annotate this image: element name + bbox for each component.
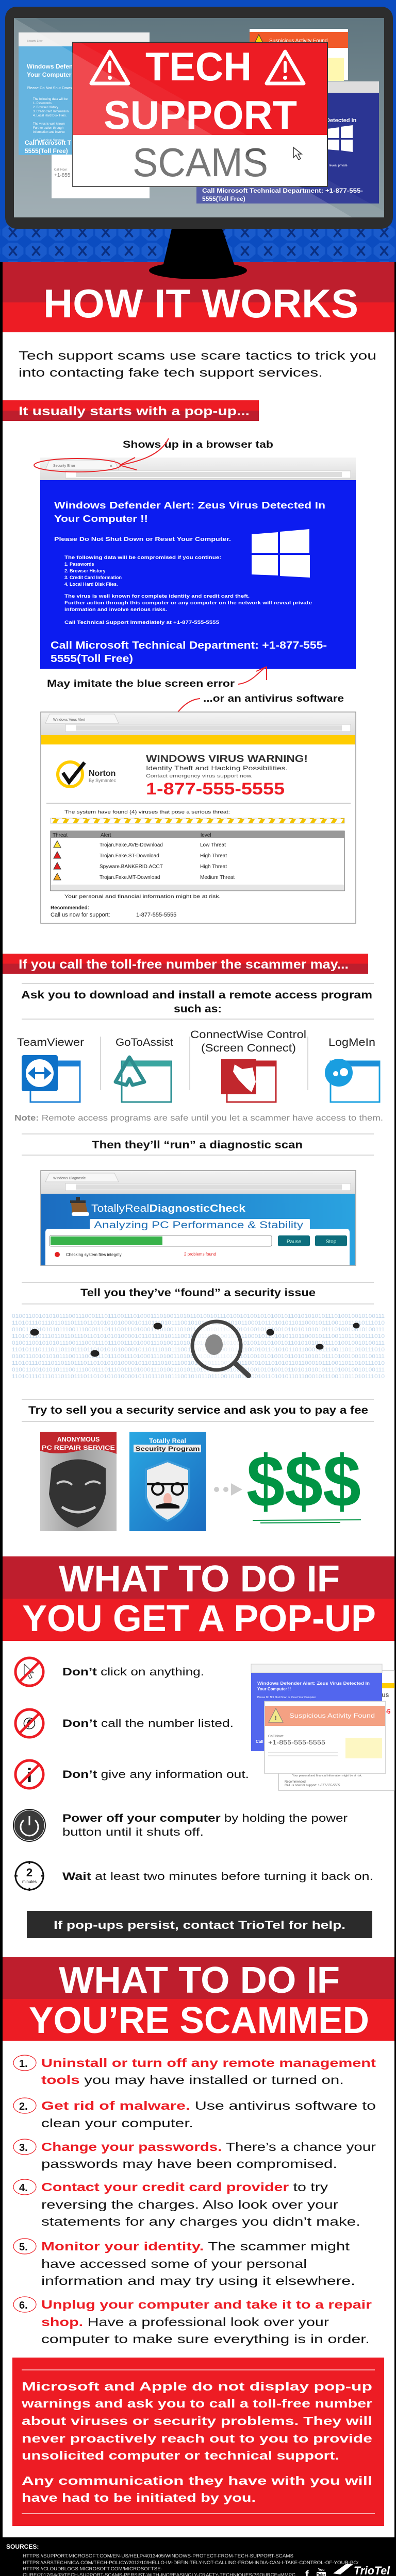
illustration: binary code with bugs and magnifier — [12, 1313, 385, 1380]
popup: light blue defender alert: 3. Credit Card Information — [33, 110, 69, 113]
browser: norton antivirus warning: 1-877-555-5555 — [146, 779, 285, 798]
step 4: reversing the charges. Also look over your — [41, 2198, 338, 2211]
browser: blue screen defender alert: 2. Browser History — [64, 568, 106, 573]
popup cluster illustration: +1-855-555-5555 — [268, 1739, 325, 1746]
caption: or an antivirus software: ...or an antivirus software — [203, 693, 344, 704]
popup: light blue defender alert: 5555(Toll Free) — [25, 147, 68, 155]
intro text: into contacting fake tech support services. — [19, 366, 323, 379]
popup: light blue defender alert: Windows Defender Alert — [27, 63, 98, 70]
step 6: Unplug your computer and take it to a repair — [41, 2298, 372, 2311]
arrow: to blue screen — [238, 667, 267, 684]
banner: what to do if you get a pop-up: WHAT TO DO IF — [59, 1558, 340, 1600]
icon: no phone — [15, 1709, 43, 1737]
popup cluster illustration: 5-5 — [382, 1708, 391, 1715]
banner: what to do if you're scammed: YOU’RE SCAMMED — [29, 2000, 369, 2041]
tip: power off: button until it shuts off. — [62, 1826, 204, 1838]
step 5 — [13, 2239, 355, 2287]
illustration: binary code with bugs and magnifier: 1101011101110110110111011010101010000101101110101110010101101110010101100010110101011011000101110011011010111010 — [12, 1360, 385, 1366]
callout: contact triotel — [27, 1911, 372, 1938]
icon: no info: i — [27, 1765, 32, 1787]
step 6: shop. Have a professional look over your — [41, 2315, 329, 2329]
browser: norton antivirus warning: Contact emergency virus support now. — [146, 773, 253, 778]
product box: totally real security program: Security Program — [135, 1445, 200, 1452]
title box: SUPPORT — [104, 92, 297, 138]
popup: light blue defender alert: 4. Local Hard Disk Files. — [33, 114, 67, 117]
popup cluster illustration: Call us now for support: 1-877-555-5555 — [285, 1784, 340, 1787]
tip: power off: Power off your computer by holding the power — [62, 1812, 348, 1824]
browser: blue screen defender alert: Call Microsoft Technical Department: +1-877-555- — [51, 640, 327, 651]
icon: windows logo — [252, 529, 310, 578]
popup cluster illustration: ! — [275, 1715, 277, 1721]
browser: norton antivirus warning: Norton — [89, 769, 116, 778]
product box: anonymous pc repair service: ANONYMOUS — [57, 1436, 100, 1443]
icon: no phone: ✆ — [23, 1716, 36, 1733]
popup cluster illustration — [251, 1664, 394, 1790]
popup: dark blue defender alert: Detected In — [326, 117, 357, 124]
heading: remote access program — [21, 989, 372, 1015]
icon: cursor — [293, 147, 302, 160]
banner: how it works: HOW IT WORKS — [43, 281, 358, 326]
illustration: binary code with bugs and magnifier: 1101011101110110110111011010101010000101101110101110010101101110010101100010110101011011000101110011011010111010 — [12, 1333, 385, 1340]
popup cluster illustration: Your personal and financial information might be at risk. — [292, 1774, 362, 1777]
tip: wait two minutes: Wait at least two minutes before turning it back on. — [62, 1871, 373, 1883]
title box: TECH — [145, 44, 252, 89]
popup: suspicious activity orange — [250, 29, 348, 81]
footer: sources: HTTPS://CLOUDBLOGS.MICROSOFT.COM/MICROSOFTSE- — [23, 2566, 162, 2571]
popup: dark blue defender alert — [196, 81, 379, 204]
callout: contact triotel: If pop-ups persist, contact TrioTel for help. — [54, 1919, 345, 1931]
browser: fake diagnostic check: TotallyReal DiagnosticCheck — [91, 1203, 246, 1214]
popup: suspicious activity orange: Suspicious Activity Found — [269, 38, 327, 44]
title box: SCAMS — [133, 140, 268, 185]
popup cluster illustration: RUS — [378, 1693, 389, 1699]
banner: how it works — [3, 229, 394, 332]
popup: dark blue defender alert: ill reveal private — [326, 164, 348, 167]
money: $$$: $$$ — [246, 1440, 361, 1522]
illustration: binary code with bugs and magnifier: 0100110010101011100111000111011100111010001110100110101101001011101001010010101001011010101010111010010010100111 — [12, 1327, 385, 1333]
threat table: Spyware.BANKERID.ACCT — [100, 864, 163, 870]
heading: remote access program: Ask you to download and install a remote access program — [21, 989, 372, 1001]
browser: blue screen defender alert: The virus is well known for complete identity and credit card theft. — [64, 594, 250, 599]
threat table: High Threat — [200, 853, 227, 859]
step 4: 4. — [19, 2182, 28, 2194]
threat table: Trojan.Fake.MT-Download — [100, 875, 160, 880]
step 5: Monitor your identity. The scammer might — [41, 2240, 350, 2253]
caption: may imitate the blue screen error: May imitate the blue screen error — [47, 679, 235, 689]
browser: norton antivirus warning: Identity Theft and Hacking Possibilities. — [146, 765, 288, 772]
monitor bezel — [5, 7, 393, 229]
browser: norton antivirus warning: 1-877-555-5555 — [136, 912, 176, 918]
browser: norton antivirus warning: Recommended: — [51, 905, 89, 911]
callout: microsoft and apple warning: Any communication they have with you will — [22, 2474, 372, 2487]
intro text: Tech support scams use scare tactics to trick you — [19, 349, 376, 362]
icon: timer — [14, 1861, 44, 1891]
callout: microsoft and apple warning: unsolicited computer or technical support. — [22, 2449, 339, 2462]
step 5: 5. — [19, 2242, 28, 2253]
illustration: binary code with bugs and magnifier: 1101011101110110110111011010101010000101101110101110010101101110010101100010110101011011000101110011011010111010 — [12, 1374, 385, 1380]
threat table: High Threat — [200, 864, 227, 870]
threat table: Low Threat — [200, 842, 226, 848]
tip: don't call — [15, 1709, 234, 1737]
browser: fake diagnostic check — [41, 1171, 356, 1265]
banner: what to do if you're scammed: WHAT TO DO IF — [59, 1960, 340, 2001]
browser: blue screen defender alert: Security Error — [53, 464, 75, 468]
popup: light blue defender alert: information and involve — [33, 131, 65, 134]
browser: norton antivirus warning: By Symantec — [89, 778, 117, 783]
title box — [73, 42, 327, 187]
callout: microsoft and apple warning: never proactively reach out to you to provide — [22, 2432, 372, 2445]
browser: blue screen defender alert: information and involve serious risks. — [64, 607, 167, 612]
step 1: Uninstall or turn off any remote management — [41, 2056, 376, 2070]
caption: shows up in a browser tab: Shows up in a browser tab — [123, 439, 273, 450]
illustration: binary code with bugs and magnifier: 1101011101110110110111011010101010000101101110101110010101101110010101100010110101011011000101110011011010111010 — [12, 1347, 385, 1353]
app: logmein: LogMeIn — [328, 1037, 375, 1048]
footer: sources: SOURCES: — [6, 2543, 39, 2550]
step 4: Contact your credit card provider to try — [41, 2180, 328, 2194]
popup: light blue defender alert: 1. Passwords — [33, 102, 52, 105]
browser: fake diagnostic check: Pause — [287, 1239, 302, 1245]
step 3: 3. — [19, 2142, 28, 2154]
tip: don't give info — [15, 1760, 249, 1788]
product box: totally real security program — [129, 1432, 206, 1531]
icon: timer: minutes — [22, 1879, 37, 1884]
popup: light blue defender alert: Call Technical Support — [33, 139, 64, 142]
step 2 — [13, 2098, 376, 2130]
monitor screen — [14, 18, 384, 217]
section bar: it usually starts with a pop-up — [3, 400, 259, 421]
popup: light blue defender alert — [19, 32, 150, 155]
browser: blue screen defender alert — [40, 457, 356, 669]
browser: blue screen defender alert: Windows Defender Alert: Zeus Virus Detected In — [54, 500, 325, 511]
callout: microsoft and apple warning: about viruses or security problems. They will — [22, 2414, 372, 2428]
note: remote access programs: Note: Remote access programs are safe until you let a scammer have access to them. — [14, 1114, 383, 1123]
illustration: binary code with bugs and magnifier: 0100110010101011100111000111011100111010001110100110101101001011101001010010101001011010101010111010010010100111 — [12, 1340, 385, 1346]
browser: blue screen defender alert: Further action through this computer or any computer on the network will reveal private — [64, 600, 312, 605]
app: connectwise control — [190, 1029, 306, 1102]
app: teamviewer: TeamViewer — [17, 1037, 84, 1048]
browser: blue screen defender alert: Please Do Not Shut Down or Reset Your Computer. — [54, 536, 231, 543]
popup cluster illustration: Please Do Not Shut Down or Reset Your Computer. — [257, 1696, 316, 1699]
browser: norton antivirus warning: WINDOWS VIRUS WARNING! — [146, 754, 308, 765]
heading: diagnostic scan: Then they’ll “run” a diagnostic scan — [92, 1139, 303, 1151]
popup: light blue defender alert: Please Do Not Shut Down — [27, 86, 72, 90]
browser: fake diagnostic check: Stop — [326, 1239, 337, 1245]
browser: fake diagnostic check: Checking system files integrity — [66, 1252, 122, 1257]
threat table: Alert — [101, 833, 111, 838]
icon: no info — [15, 1760, 43, 1788]
browser: norton antivirus warning: Call us now for support: — [51, 912, 110, 918]
app: gotoassist: GoToAssist — [116, 1037, 173, 1048]
browser: norton antivirus warning: Your personal and financial information might be at risk. — [64, 894, 221, 900]
product box: anonymous pc repair service: PC REPAIR SERVICE — [42, 1444, 115, 1451]
banner: what to do if you get a pop-up — [3, 1556, 394, 1641]
popup: light blue defender alert: Call Microsoft T — [25, 139, 72, 146]
icon: youtube: You — [318, 2568, 324, 2572]
step 6: computer to make sure everything is in order. — [41, 2332, 370, 2346]
icon: norton logo — [58, 762, 85, 787]
step 1: 1. — [19, 2058, 28, 2070]
footer: sources — [0, 2537, 396, 2576]
icon: no cursor — [15, 1658, 43, 1686]
section bar: if you call the toll-free number: If you call the toll-free number the scammer may... — [19, 957, 349, 972]
browser: blue screen defender alert: ✕ — [109, 464, 113, 468]
section bar: if you call the toll-free number — [3, 954, 368, 974]
step 3 — [13, 2139, 376, 2171]
illustration: binary code with bugs and magnifier: 0100110010101011100111000111011100111010001110100110101101001011101001010010101001011010101010111010010010100111 — [12, 1313, 385, 1319]
banner: what to do if you're scammed — [3, 1957, 394, 2041]
step 5: information and may try using it elsewhere. — [41, 2274, 355, 2287]
callout: microsoft and apple warning — [12, 2358, 384, 2526]
browser: blue screen defender alert: 5555(Toll Free) — [51, 653, 133, 665]
browser: blue screen defender alert: Your Computer !! — [54, 514, 148, 524]
heading: remote access program: such as: — [174, 1003, 222, 1015]
illustration: binary code with bugs and magnifier: 1101011101110110110111011010101010000101101110101110010101101110010101100010110101011011000101110011011010111010 — [12, 1320, 385, 1326]
popup: light blue defender alert: Your Computer — [27, 71, 72, 78]
browser: fake diagnostic check: 2 problems found — [184, 1252, 216, 1257]
icon: stamp — [70, 1197, 89, 1216]
tip: don't call: Don’t call the number listed. — [62, 1718, 234, 1730]
step 5: have accessed some of your personal — [41, 2257, 307, 2270]
icon: youtube — [317, 2568, 326, 2576]
step 6 — [13, 2297, 372, 2346]
browser: blue screen defender alert: The following data will be compromised if you continue: — [64, 555, 221, 560]
browser: norton antivirus warning — [41, 712, 356, 923]
step 3: passwords may have been compromised. — [41, 2157, 337, 2171]
product box: anonymous pc repair service — [40, 1432, 117, 1531]
icon: warning triangle left — [91, 52, 128, 83]
step 1 — [13, 2055, 376, 2087]
browser: blue screen defender alert: 1. Passwords — [64, 562, 94, 567]
popup: light blue defender alert: Security Error — [27, 40, 43, 43]
step 2: Get rid of malware. Use antivirus software to — [41, 2099, 376, 2112]
popup: dark blue defender alert: 5555(Toll Free) — [202, 195, 245, 202]
callout: microsoft and apple warning: have had to be initiated by you. — [22, 2491, 256, 2504]
threat table: level — [201, 833, 211, 838]
arrow: to antivirus — [170, 699, 200, 725]
footer: sources: HTTPS://SUPPORT.MICROSOFT.COM/EN-US/HELP/4013405/WINDOWS-PROTECT-FROM-TECH-SUPPORT-SCAMS — [23, 2553, 293, 2558]
app: logmein — [325, 1037, 380, 1102]
footer: sources: HTTPS://ARSTECHNICA.COM/TECH-POLICY/2012/10/HELLO-IM-DEFINITELY-NOT-CALLING-FROM-INDIA-CAN-I-TAKE-CONTROL-OF-YOUR-PC/ — [23, 2560, 359, 2565]
icon: warning triangle right — [267, 52, 304, 83]
illustration: binary code with bugs and magnifier: 0100110010101011100111000111011100111010001110100110101101001011101001010010101001011010101010111010010010100111 — [12, 1367, 385, 1373]
callout: microsoft and apple warning: warnings and ask you to call a toll-free number — [21, 2397, 372, 2410]
step 4 — [13, 2179, 360, 2228]
browser: fake diagnostic check: Analyzing PC Performance & Stability — [94, 1220, 304, 1231]
popup: white call now: +1-855 — [54, 173, 71, 178]
app: teamviewer — [17, 1037, 84, 1102]
step 2: clean your computer. — [41, 2116, 193, 2130]
threat table: Medium Threat — [200, 875, 235, 880]
steps list — [13, 2055, 376, 2346]
browser: blue screen defender alert: Call Technical Support Immediately at +1-877-555-5555 — [64, 620, 219, 625]
product box: totally real security program: Totally Real — [149, 1437, 186, 1445]
tip: don't click — [15, 1658, 204, 1686]
annotation: red circle on tab — [34, 438, 169, 472]
app: gotoassist — [116, 1037, 173, 1102]
popup: light blue defender alert: 2. Browser History — [33, 106, 58, 109]
step 2: 2. — [19, 2101, 28, 2112]
popup: white call now — [52, 155, 150, 198]
browser: fake diagnostic check: Windows Diagnostic — [53, 1177, 86, 1180]
arrow: dots to money — [214, 1483, 242, 1496]
popup cluster illustration: Windows Defender Alert: Zeus Virus Detected In — [257, 1681, 370, 1686]
tip: wait two minutes — [14, 1861, 373, 1891]
popup cluster illustration: Your Computer !! — [257, 1687, 291, 1691]
tip: don't click: Don’t click on anything. — [62, 1666, 204, 1678]
step 3: Change your passwords. There’s a chance your — [41, 2140, 376, 2154]
heading: sell a security service: Try to sell you a security service and ask you to pay a fee — [28, 1404, 368, 1416]
popup: light blue defender alert: The virus is well known — [33, 123, 65, 126]
banner: what to do if you get a pop-up: YOU GET A POP-UP — [22, 1598, 376, 1639]
step 4: statements for any charges you didn’t make. — [41, 2215, 360, 2228]
tip: power off — [13, 1809, 348, 1841]
popup: dark blue defender alert: Call Microsoft Technical Department: +1-877-555- — [202, 187, 363, 194]
heading: found a security issue: Tell you they’ve “found” a security issue — [80, 1287, 316, 1299]
app: connectwise control: ConnectWise Control — [190, 1029, 306, 1041]
browser: blue screen defender alert: 3. Credit Card Information — [64, 575, 122, 580]
callout: microsoft and apple warning: Microsoft and Apple do not display pop-up — [22, 2380, 372, 2393]
threat table — [51, 831, 344, 891]
popup: light blue defender alert: Further action through — [33, 127, 63, 130]
intro text — [19, 349, 376, 379]
browser: norton antivirus warning: The system have found (4) viruses that pose a serious threat: — [64, 809, 230, 815]
icon: power button — [13, 1809, 45, 1841]
popup: white call now: Call Now: — [54, 168, 68, 172]
popup cluster illustration: Recommended: — [285, 1781, 307, 1784]
illustration: binary code with bugs and magnifier: 0100110010101011100111000111011100111010001110100110101101001011101001010010101001011010101010111010010010100111 — [12, 1353, 385, 1360]
section bar: it usually starts with a pop-up: It usually starts with a pop-up... — [19, 404, 250, 418]
icon: timer: 2 — [26, 1866, 32, 1879]
popup: light blue defender alert: The following data will be — [33, 98, 68, 101]
popup cluster illustration: Call Now: — [268, 1735, 284, 1738]
logo: triotel — [333, 2564, 390, 2576]
popup cluster illustration: Suspicious Activity Found — [289, 1712, 375, 1719]
tip: don't give info: Don’t give any information out. — [62, 1769, 249, 1781]
browser: blue screen defender alert: 4. Local Hard Disk Files. — [64, 582, 118, 587]
header: monitor with pop-ups — [0, 0, 396, 262]
app: connectwise control: (Screen Connect) — [201, 1042, 296, 1054]
monitor stand — [149, 229, 247, 279]
threat table: Trojan.Fake.AVE-Download — [100, 842, 163, 848]
threat table: Trojan.Fake.ST-Download — [100, 853, 159, 859]
threat table: Threat — [53, 833, 68, 838]
step 6: 6. — [19, 2300, 28, 2311]
popup cluster illustration: Call — [256, 1739, 263, 1744]
browser: norton antivirus warning: Windows Virus Alert — [53, 718, 85, 722]
step 1: tools you may have installed or turned on. — [41, 2073, 344, 2087]
